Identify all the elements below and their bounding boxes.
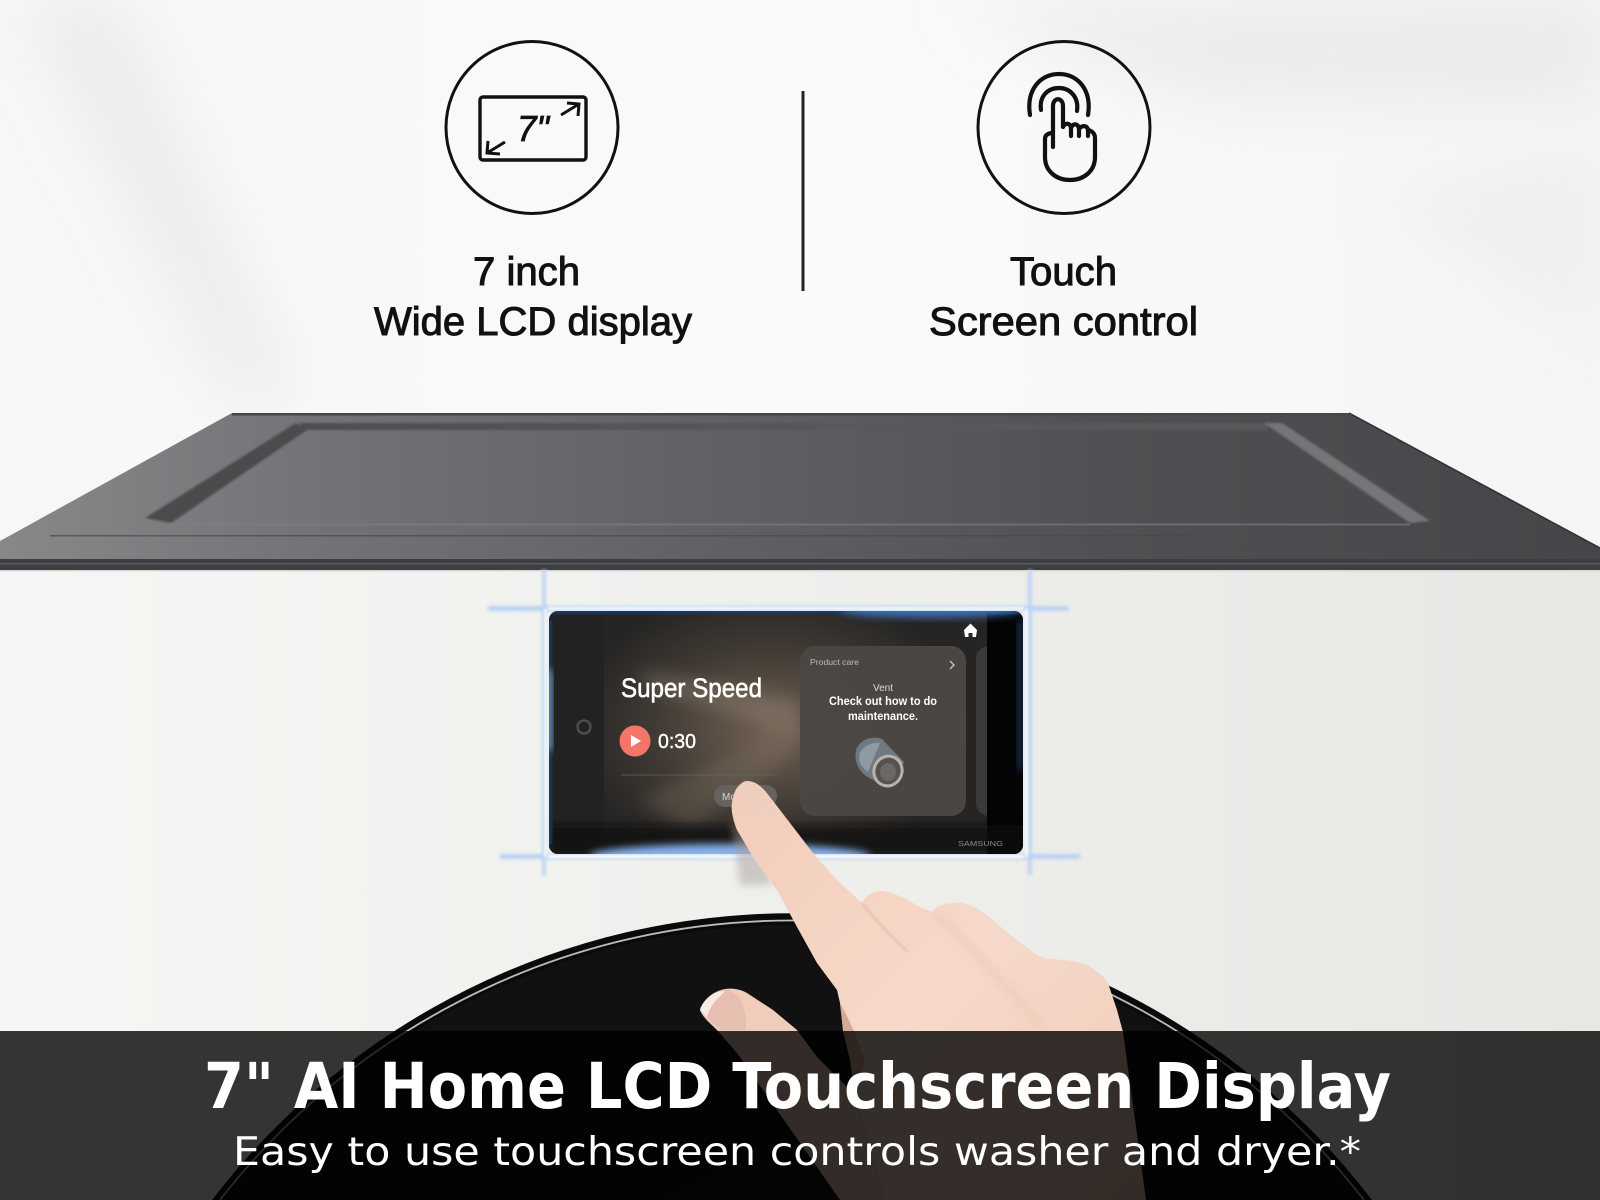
touchscreen display bbox=[546, 604, 1024, 868]
door drum bbox=[212, 913, 1372, 1200]
knuckle shading bbox=[935, 915, 1040, 1028]
icon: home bbox=[964, 624, 977, 637]
program title: Super Speed bbox=[621, 673, 762, 703]
product care card bbox=[800, 646, 966, 816]
timer: 0:30 bbox=[658, 731, 696, 753]
thumb bbox=[700, 989, 885, 1200]
samsung mark: SAMSUNG bbox=[958, 839, 1003, 848]
index fingernail bbox=[738, 783, 775, 818]
more button: More bbox=[722, 792, 745, 803]
palm and index finger bbox=[732, 781, 1146, 1200]
more button bbox=[714, 785, 777, 807]
divider bbox=[802, 91, 804, 291]
power icon bbox=[578, 720, 590, 734]
palm shadow bbox=[840, 1003, 865, 1095]
thumbnail tip bbox=[700, 991, 725, 1017]
label: 7 inch wide LCD display bbox=[374, 250, 692, 344]
screen body bbox=[546, 604, 1024, 868]
finger shadow bbox=[732, 820, 772, 885]
label: touch screen control: Touch bbox=[1010, 250, 1117, 294]
icon: 7 inch screen size bbox=[446, 42, 618, 214]
icon: 7 inch screen size: 7" bbox=[517, 108, 551, 149]
label: touch screen control: Screen control bbox=[929, 300, 1198, 344]
icon: touch screen finger bbox=[978, 42, 1150, 214]
label: 7 inch wide LCD display: Wide LCD display bbox=[374, 300, 692, 344]
product care card: Vent bbox=[873, 683, 893, 694]
product care card: Product care bbox=[810, 657, 859, 667]
play button bbox=[620, 726, 650, 756]
vent pipe image bbox=[855, 738, 906, 790]
finger crease bbox=[862, 903, 908, 952]
label: 7 inch wide LCD display: 7 inch bbox=[473, 250, 580, 294]
product care card: Check out how to do bbox=[829, 696, 937, 708]
blue guide lines bbox=[488, 570, 1080, 875]
banner bbox=[0, 1031, 1600, 1200]
separator bbox=[621, 774, 777, 776]
thumbnail bbox=[700, 989, 746, 1030]
banner title: 7" AI Home LCD Touchscreen Display bbox=[204, 1050, 1391, 1123]
product care card: maintenance. bbox=[848, 711, 918, 723]
next card edge bbox=[976, 646, 987, 816]
label: touch screen control bbox=[929, 250, 1198, 344]
hand touching the display bbox=[700, 781, 1146, 1200]
banner subtitle: Easy to use touchscreen controls washer and dryer.* bbox=[233, 1130, 1361, 1175]
washer dryer top panel bbox=[0, 413, 1600, 572]
